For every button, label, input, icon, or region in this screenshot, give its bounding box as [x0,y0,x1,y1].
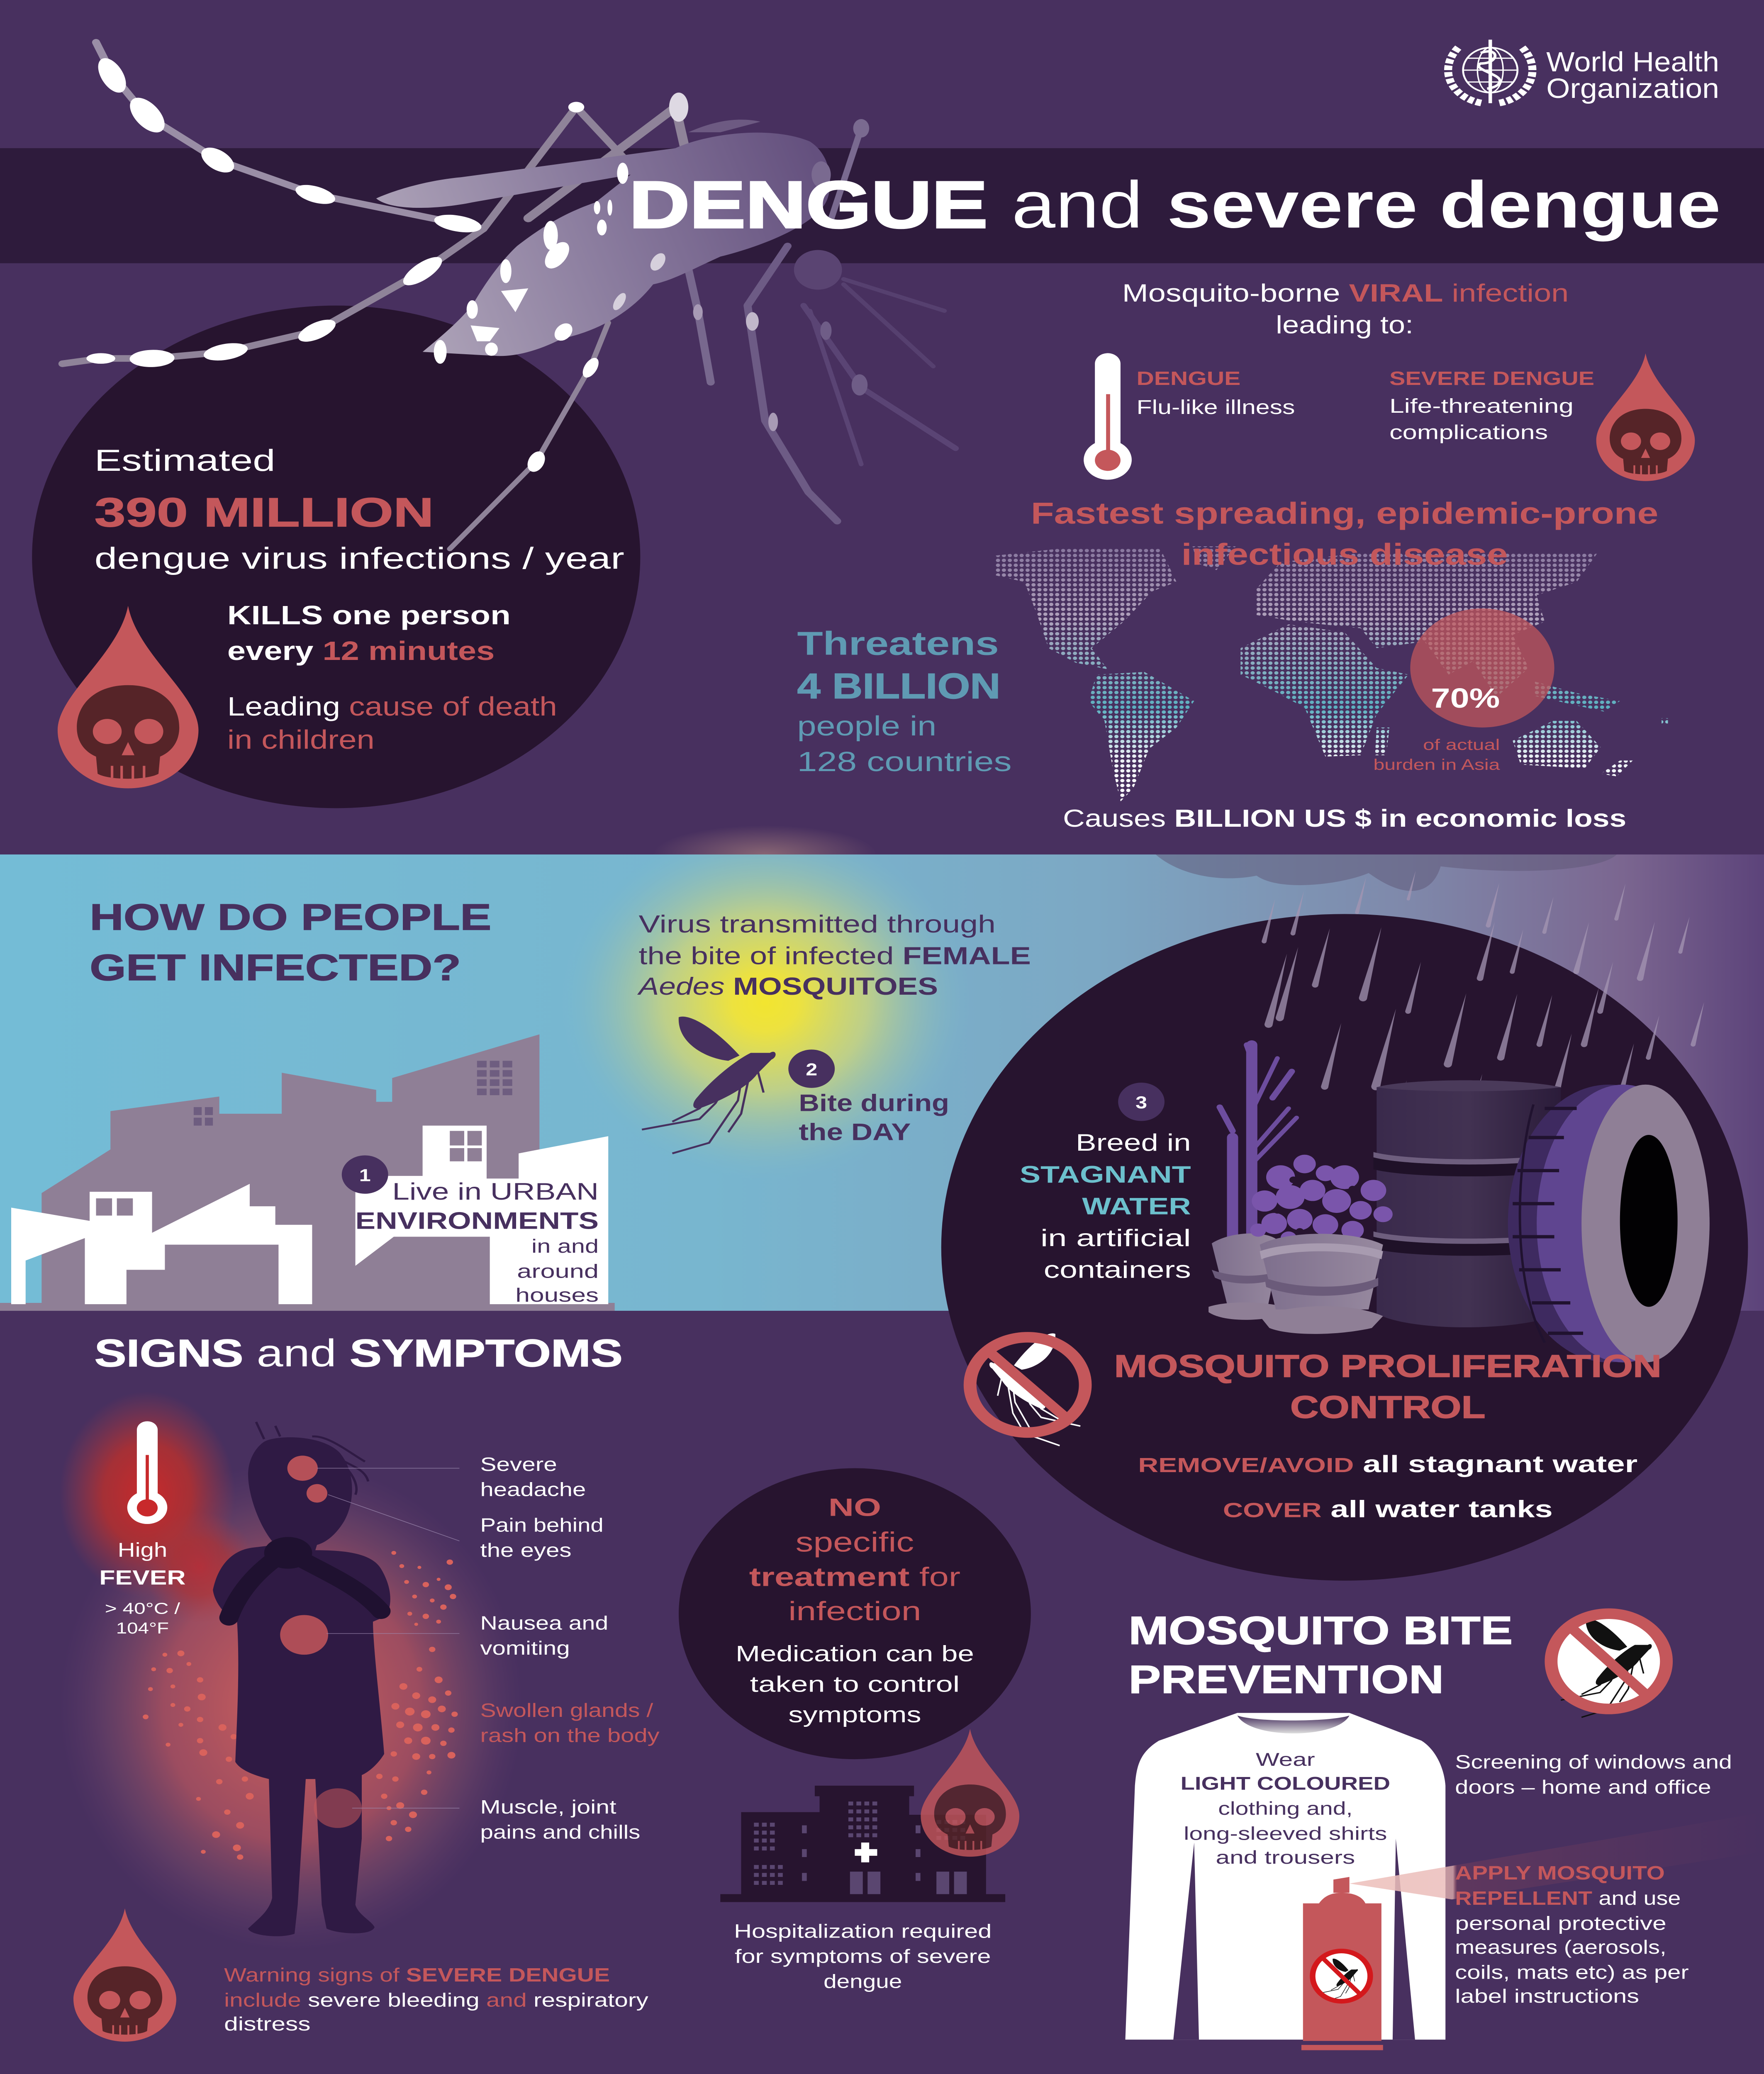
labels: symptoms: vomiting [480,1638,570,1659]
text block: severe dengue: complications [1389,421,1548,443]
panel: how do people get infected background [0,824,1764,1311]
illustration: long-sleeved shirt [1125,1713,1445,2040]
symptom marker: knee [314,1788,362,1828]
text block: screening: Screening of windows and [1455,1751,1732,1772]
text block: shirt: and trousers [1216,1847,1355,1868]
stat: 70 percent in Asia: 70% [1431,683,1500,713]
icon: severe dengue drop [1596,353,1695,481]
text block: breed in stagnant water: Breed in [1076,1129,1191,1156]
text block: kills and leading cause: KILLS one person [227,600,511,630]
text block: hospitalization: Hospitalization required [734,1921,992,1942]
illustration: child silhouette [213,1422,390,1936]
text block: screening [1455,1751,1732,1798]
text block: live in urban environments [356,1178,599,1306]
logo wordmark: Organization [1546,73,1719,104]
logo: World Health Organization [1448,40,1719,104]
text block: threatens 4 billion [797,625,1012,777]
icon: no mosquito [970,1334,1085,1446]
text block: repellent: coils, mats etc) as per [1455,1962,1689,1983]
labels: symptoms: Severe [480,1453,557,1475]
text block: dengue: DENGUE [1136,368,1240,389]
text block: economic loss: Causes BILLION US $ in economic loss [1063,805,1626,832]
text block: bite during the day: Bite during [799,1089,949,1116]
heading: fastest spreading [1031,497,1658,572]
rain [1262,871,1704,1148]
text block: viral infection intro [1122,279,1569,339]
icon: hospital drop [921,1729,1019,1857]
text block: severe dengue: Life-threatening [1389,395,1574,417]
storm cloud [1156,854,1617,891]
text block: breed in stagnant water: WATER [1082,1193,1191,1220]
text block: shirt: Wear [1256,1749,1315,1770]
badge 2 [788,1049,835,1088]
text block: repellent: personal protective [1455,1913,1667,1934]
heading: mosquito proliferation control: CONTROL [1290,1389,1486,1425]
heading: how do people get infected: GET INFECTED? [90,947,461,988]
text block: remove and cover: REMOVE/AVOID all stagnant water [1138,1451,1637,1478]
panel: no specific treatment: symptoms [788,1702,921,1727]
heading: mosquito proliferation control: MOSQUITO PROLIFERATION [1114,1348,1662,1384]
illustration: hospital [720,1786,1005,1902]
text block: threatens 4 billion: Threatens [797,625,999,662]
labels: symptoms: rash on the body [480,1725,660,1746]
text block: breed in stagnant water: STAGNANT [1020,1161,1191,1188]
logo wordmark: World Health [1546,46,1719,78]
labels: symptoms: headache [480,1479,586,1500]
illustration: large mosquito [62,42,955,549]
text block: viral infection intro: leading to: [1276,311,1413,339]
text block: shirt [1181,1749,1390,1868]
text block: repellent: label instructions [1455,1985,1639,2007]
symptom marker: eyes [307,1484,327,1502]
illustration: body glow and rash [59,1392,524,1951]
text block: breed in stagnant water: containers [1044,1256,1191,1283]
logo wordmark [1546,46,1719,104]
labels: symptoms: Nausea and [480,1612,608,1633]
text block: warning signs: include severe bleeding and respiratory [224,1989,648,2011]
heading: how do people get infected: HOW DO PEOPLE [90,897,492,938]
text block: high fever: > 40°C / [105,1599,180,1617]
panel: estimate circle [32,306,640,808]
illustration: city [0,1035,615,1311]
text block: hospitalization: dengue [824,1971,902,1992]
heading: fastest spreading: infectious disease [1182,538,1508,572]
text block: warning signs [224,1964,648,2035]
illustration: bamboo [1220,1045,1296,1290]
text block: kills and leading cause [227,600,557,754]
stat: 70 percent in Asia [1374,683,1500,773]
text block: dengue: Flu-like illness [1136,397,1295,419]
stat: 70 percent in Asia: burden in Asia [1374,756,1500,773]
text block: virus transmitted [637,910,1031,1000]
text block: estimated infections: 390 MILLION [95,490,434,536]
illustration: plant foliage [1250,1155,1393,1247]
text block: live in urban environments: houses [515,1284,599,1306]
badge 3: 3 [1135,1093,1147,1112]
sun glow [591,854,936,1153]
text block: repellent: APPLY MOSQUITO [1455,1862,1665,1884]
labels: symptoms [480,1453,660,1843]
badge 1 [342,1155,388,1194]
text block: virus transmitted: Virus transmitted through [639,910,996,938]
labels: symptoms: Swollen glands / [480,1700,653,1721]
left white buildings [11,1184,312,1304]
rash dots [143,1551,458,1860]
text block: virus transmitted: Aedes MOSQUITOES [637,973,938,1000]
text block: estimated infections: dengue virus infections / year [95,541,624,575]
text block: high fever: FEVER [99,1566,186,1589]
panel: no specific treatment [679,1468,1031,1759]
symptom marker: stomach [280,1615,328,1655]
heading: mosquito bite prevention [1128,1608,1513,1702]
banner strip [0,148,1764,263]
title: DENGUE [629,168,988,242]
heading: signs and symptoms: SIGNS and SYMPTOMS [95,1332,623,1375]
badge 3 [1118,1083,1165,1121]
title: and [1012,168,1143,242]
illustration: left pot [1208,1234,1290,1320]
panel: no specific treatment: infection [788,1597,921,1626]
text block: live in urban environments: in and [531,1235,599,1257]
text block: estimated infections [95,443,624,575]
illustration: barrel [1374,1080,1561,1327]
text block: severe dengue: SEVERE DENGUE [1389,368,1594,389]
icon: blood drop with skull [58,606,198,789]
heading: how do people get infected [90,897,492,988]
icon: mosquito silhouette [642,1017,776,1154]
text block: live in urban environments: ENVIRONMENTS [356,1207,599,1234]
text block: warning signs: distress [224,2013,311,2035]
icon: warning drop [73,1908,176,2042]
text block: screening: doors – home and office [1455,1777,1711,1798]
right white buildings [356,1126,608,1304]
panel: no specific treatment: specific [796,1526,914,1558]
icon: fever thermometer [127,1421,167,1524]
labels: symptoms: the eyes [480,1540,571,1561]
text block: warning signs: Warning signs of SEVERE DENGUE [224,1964,610,1986]
text block: live in urban environments: around [517,1261,599,1282]
illustration: front pot [1260,1234,1383,1334]
text block: estimated infections: Estimated [95,443,275,477]
icon: repellent spray [1301,1812,1764,2050]
text block: breed in stagnant water: in artificial [1040,1224,1191,1251]
Asia burden circle [1410,609,1554,728]
badge 1: 1 [359,1166,371,1185]
heading: fastest spreading: Fastest spreading, epidemic-prone [1031,497,1658,531]
text block: hospitalization: for symptoms of severe [735,1946,991,1967]
panel: no specific treatment: taken to control [750,1672,960,1697]
stat: 70 percent in Asia: of actual [1423,736,1500,753]
panel: no specific treatment: NO [828,1493,881,1521]
title: severe dengue [1167,168,1721,242]
text block: high fever [99,1539,186,1637]
title [629,168,1721,242]
world map [996,546,1668,801]
illustration: tyre [1508,1085,1710,1362]
text block: bite during the day: the DAY [799,1118,911,1145]
text block: kills and leading cause: Leading cause of death [227,691,557,721]
text block: virus transmitted: the bite of infected FEMALE [639,942,1031,969]
text block: live in urban environments: Live in URBAN [392,1178,599,1205]
text block: high fever: High [118,1539,167,1561]
text block: remove and cover: COVER all water tanks [1223,1495,1553,1522]
text block: kills and leading cause: every 12 minutes [227,636,495,666]
text block: threatens 4 billion: 4 BILLION [797,666,1001,706]
icon: no mosquito bite [1551,1614,1667,1717]
icon: thermometer [1084,353,1132,480]
badge 2: 2 [806,1060,817,1079]
heading: mosquito bite prevention: MOSQUITO BITE [1128,1608,1513,1653]
text block: dengue [1136,368,1295,419]
labels: symptoms: Pain behind [480,1514,604,1536]
heading: mosquito bite prevention: PREVENTION [1128,1657,1444,1702]
heading: mosquito proliferation control [1114,1348,1662,1425]
text block: threatens 4 billion: 128 countries [797,746,1012,777]
text block: remove and cover [1138,1451,1637,1522]
text block: shirt: clothing and, [1218,1798,1352,1819]
text block: repellent [1455,1862,1689,2007]
text block: repellent: measures (aerosols, [1455,1936,1667,1958]
labels: symptoms: pains and chills [480,1821,640,1843]
text block: repellent: REPELLENT and use [1455,1887,1681,1909]
text block: severe dengue [1389,368,1594,443]
panel: no specific treatment: Medication can be [736,1641,974,1666]
text block: shirt: LIGHT COLOURED [1181,1773,1390,1794]
panel: signs and symptoms floor [0,1311,1764,2073]
symptom marker: headache [288,1456,318,1481]
panel: no specific treatment: treatment for [749,1562,960,1592]
labels: symptoms: Muscle, joint [480,1796,616,1818]
text block: hospitalization [734,1921,992,1992]
text block: kills and leading cause: in children [227,725,375,754]
text block: breed in stagnant water [1020,1129,1191,1283]
text block: high fever: 104°F [116,1619,169,1637]
panel: mosquito proliferation circle [941,871,1748,1581]
text block: threatens 4 billion: people in [797,711,936,741]
text block: bite during the day [799,1089,949,1145]
text block: shirt: long-sleeved shirts [1184,1823,1387,1844]
text block: viral infection intro: Mosquito-borne VIRAL infection [1122,279,1569,307]
